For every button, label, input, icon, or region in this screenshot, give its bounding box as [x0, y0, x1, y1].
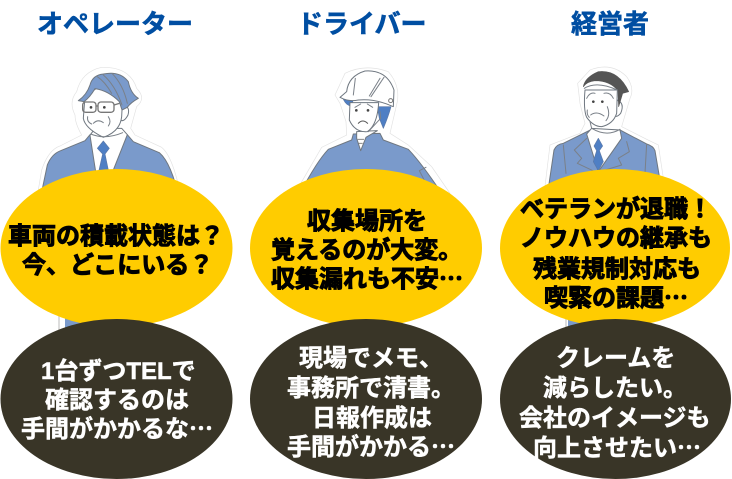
heading: operator: オペレーター	[37, 9, 193, 39]
illustration: driver with helmet	[295, 68, 450, 193]
text: executive concern: 喫緊の課題…	[544, 278, 688, 313]
text: driver issue	[287, 345, 455, 462]
heading: executive: 経営者	[571, 9, 649, 39]
speech bubble: operator issue	[0, 319, 232, 479]
text: executive concern: ノウハウの継承も	[520, 225, 712, 252]
speech bubble: operator concern	[0, 169, 232, 327]
speech bubble: driver concern	[250, 169, 482, 327]
speech bubble: executive issue	[500, 319, 731, 479]
speech bubble: driver issue	[250, 319, 482, 479]
text: driver issue: 事務所で清書。	[287, 375, 455, 402]
text: operator concern: 車両の積載状態は？	[8, 223, 224, 250]
text: operator concern: 今、どこにいる？	[22, 252, 213, 279]
text: executive concern: 残業規制対応も	[533, 255, 701, 283]
text: driver concern: 覚えるのが大変。	[271, 236, 462, 264]
text: executive issue: クレームを	[556, 345, 675, 372]
text: driver concern	[271, 208, 463, 294]
text: operator issue: 確認するのは	[45, 387, 189, 414]
text: executive concern	[520, 195, 712, 313]
text: operator concern	[8, 223, 224, 279]
text: driver issue: 手間がかかる…	[287, 427, 455, 462]
text: executive issue: 会社のイメージも	[519, 405, 711, 432]
illustration: operator with glasses	[37, 67, 182, 200]
text: executive concern: ベテランが退職！	[520, 195, 712, 223]
text: operator issue	[21, 358, 213, 444]
text: driver issue: 日報作成は	[312, 405, 432, 432]
text: operator issue: 手間がかかるな…	[21, 409, 213, 444]
text: executive issue	[519, 345, 711, 463]
operator body visible between bubbles	[58, 310, 95, 335]
text: executive issue: 減らしたい。	[543, 375, 687, 402]
illustration: executive	[543, 67, 667, 200]
heading: driver: ドライバー	[297, 9, 426, 39]
text: driver concern: 収集漏れも不安…	[271, 259, 463, 294]
text: driver issue: 現場でメモ、	[299, 345, 443, 372]
executive body visible between bubbles	[565, 310, 598, 335]
speech bubble: executive concern	[500, 169, 730, 327]
text: operator issue: 1台ずつTELで	[41, 358, 196, 385]
text: executive issue: 向上させたい…	[533, 428, 701, 463]
text: driver concern: 収集場所を	[307, 208, 427, 235]
